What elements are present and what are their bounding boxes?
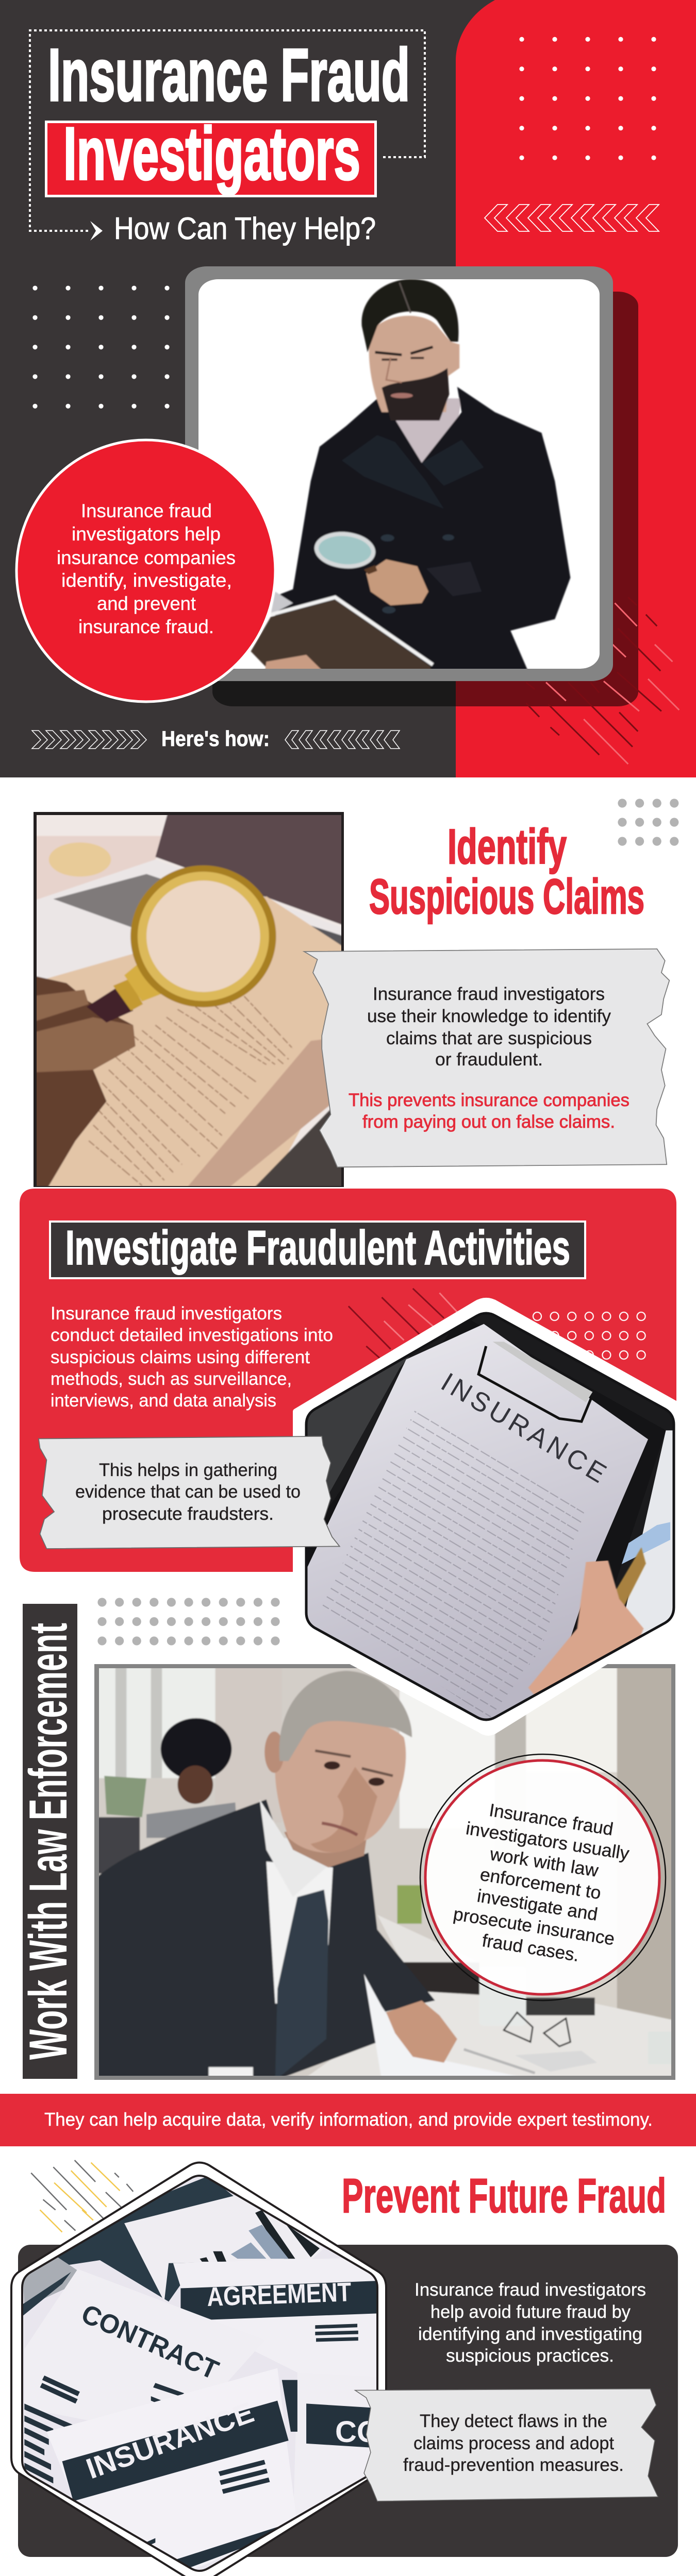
here's how row: Here's how: [161, 726, 270, 751]
callout: red intro circle: identify, investigate, [61, 570, 232, 591]
body text: conduct detailed investigations into [51, 1325, 333, 1345]
decorative dotted path around title [30, 30, 425, 231]
title: Insurance Fraud: Insurance Fraud [48, 33, 410, 116]
callout: law enforcement circle: work with law [488, 1844, 600, 1881]
body text: interviews, and data analysis [51, 1391, 276, 1411]
title box: Investigators: Investigators [63, 112, 360, 195]
chevrons: hero right [485, 205, 659, 231]
photo: contract documents hexagon: CO [335, 2415, 380, 2449]
torn note: detect flaws: fraud-prevention measures. [403, 2455, 624, 2475]
photo: contract documents hexagon: INSURANCE [82, 2396, 258, 2485]
torn note: identify text: This prevents insurance companies [349, 1090, 629, 1110]
banner: expert testimony: They can help acquire data, verify information, and provide expert testimony. [44, 2109, 653, 2130]
dot grid: hero left [19, 273, 184, 421]
decorative diagonal lines [349, 1289, 457, 1358]
torn note: identify text: from paying out on false claims. [362, 1112, 615, 1132]
dot grid: identify section [614, 793, 683, 851]
torn note: detect flaws: claims process and adopt [413, 2433, 614, 2453]
panel: hero background [0, 0, 696, 777]
torn note: evidence: prosecute fraudsters. [102, 1504, 274, 1524]
photo frame: investigator with magnifier [185, 266, 613, 681]
panel: prevent fraud dark card [18, 2245, 678, 2557]
torn note: identify text: Insurance fraud investigators [373, 984, 605, 1004]
photo shadow panel [212, 292, 638, 706]
dot grid: under red panel [93, 1592, 284, 1651]
photo: magnifier over handwritten letter [31, 809, 351, 1193]
man: head [361, 279, 459, 420]
callout: red intro circle [16, 440, 275, 702]
title box: Investigators [46, 112, 375, 196]
torn note: detect flaws: They detect flaws in the [420, 2411, 607, 2431]
dot grid: hero top right [505, 25, 670, 173]
decorative diagonal lines [526, 597, 679, 764]
subtitle: How Can They Help? [114, 211, 376, 246]
ring dot grid [528, 1307, 650, 1365]
callout: red intro circle: insurance companies [57, 547, 236, 568]
man: coat [251, 387, 570, 676]
torn note: evidence: This helps in gathering [99, 1460, 277, 1480]
heading: Identify Suspicious Claims [369, 819, 644, 924]
torn note: identify text: or fraudulent. [435, 1049, 543, 1070]
callout: red intro circle: investigators help [72, 523, 221, 545]
panel: prevent fraud dark card: identifying and investigating [418, 2324, 642, 2344]
body text [51, 1303, 333, 1411]
body text: Insurance fraud investigators [51, 1303, 282, 1324]
decorative diagonal lines: documents section [31, 2160, 133, 2232]
callout: law enforcement circle: prosecute insurance [452, 1904, 616, 1949]
photo: businessman at desk [89, 1664, 679, 2080]
callout: law enforcement circle [420, 1754, 666, 2001]
photo: contract documents hexagon [11, 2163, 386, 2576]
callout: law enforcement circle: enforcement to [478, 1865, 603, 1903]
callout: law enforcement circle: investigate and [476, 1886, 599, 1925]
torn note: identify text: claims that are suspicious [386, 1028, 592, 1048]
torn note: evidence: evidence that can be used to [75, 1482, 301, 1502]
torn note: identify text: use their knowledge to identify [367, 1006, 611, 1026]
heading: Identify Suspicious Claims: Identify [448, 819, 567, 874]
panel: prevent fraud dark card: help avoid future fraud by [430, 2302, 631, 2322]
callout: law enforcement circle: fraud cases. [480, 1930, 581, 1965]
panel: prevent fraud dark card: suspicious practices. [446, 2346, 614, 2366]
icon: arrow head [90, 221, 103, 241]
panel: prevent fraud dark card: Insurance fraud investigators [415, 2280, 646, 2300]
panel: law enforcement heading bar [19, 1604, 78, 2079]
torn note: evidence [39, 1436, 340, 1549]
here's how row [32, 726, 400, 751]
photo: contract documents hexagon: CONTRACT [77, 2299, 223, 2386]
torn note: identify text [304, 949, 669, 1167]
torn note: detect flaws [355, 2389, 658, 2501]
panel: law enforcement heading bar: Work With Law Enforcement [19, 1623, 78, 2060]
callout: red intro circle: Insurance fraud [81, 500, 212, 521]
panel: investigate fraudulent activities [20, 1189, 676, 1572]
photo: insurance document on clipboard: INSURANCE [436, 1367, 611, 1489]
callout: law enforcement circle: Insurance fraud [488, 1800, 615, 1839]
banner: expert testimony [0, 2094, 696, 2146]
body text: suspicious claims using different [51, 1347, 310, 1367]
photo: insurance document on clipboard [267, 1301, 679, 1733]
callout: red intro circle: and prevent [97, 593, 196, 614]
body text: methods, such as surveillance, [51, 1369, 292, 1389]
callout: law enforcement circle: investigators usually [465, 1818, 631, 1864]
photo: contract documents hexagon: AGREEMENT [206, 2277, 352, 2312]
callout: red intro circle: insurance fraud. [78, 616, 214, 637]
